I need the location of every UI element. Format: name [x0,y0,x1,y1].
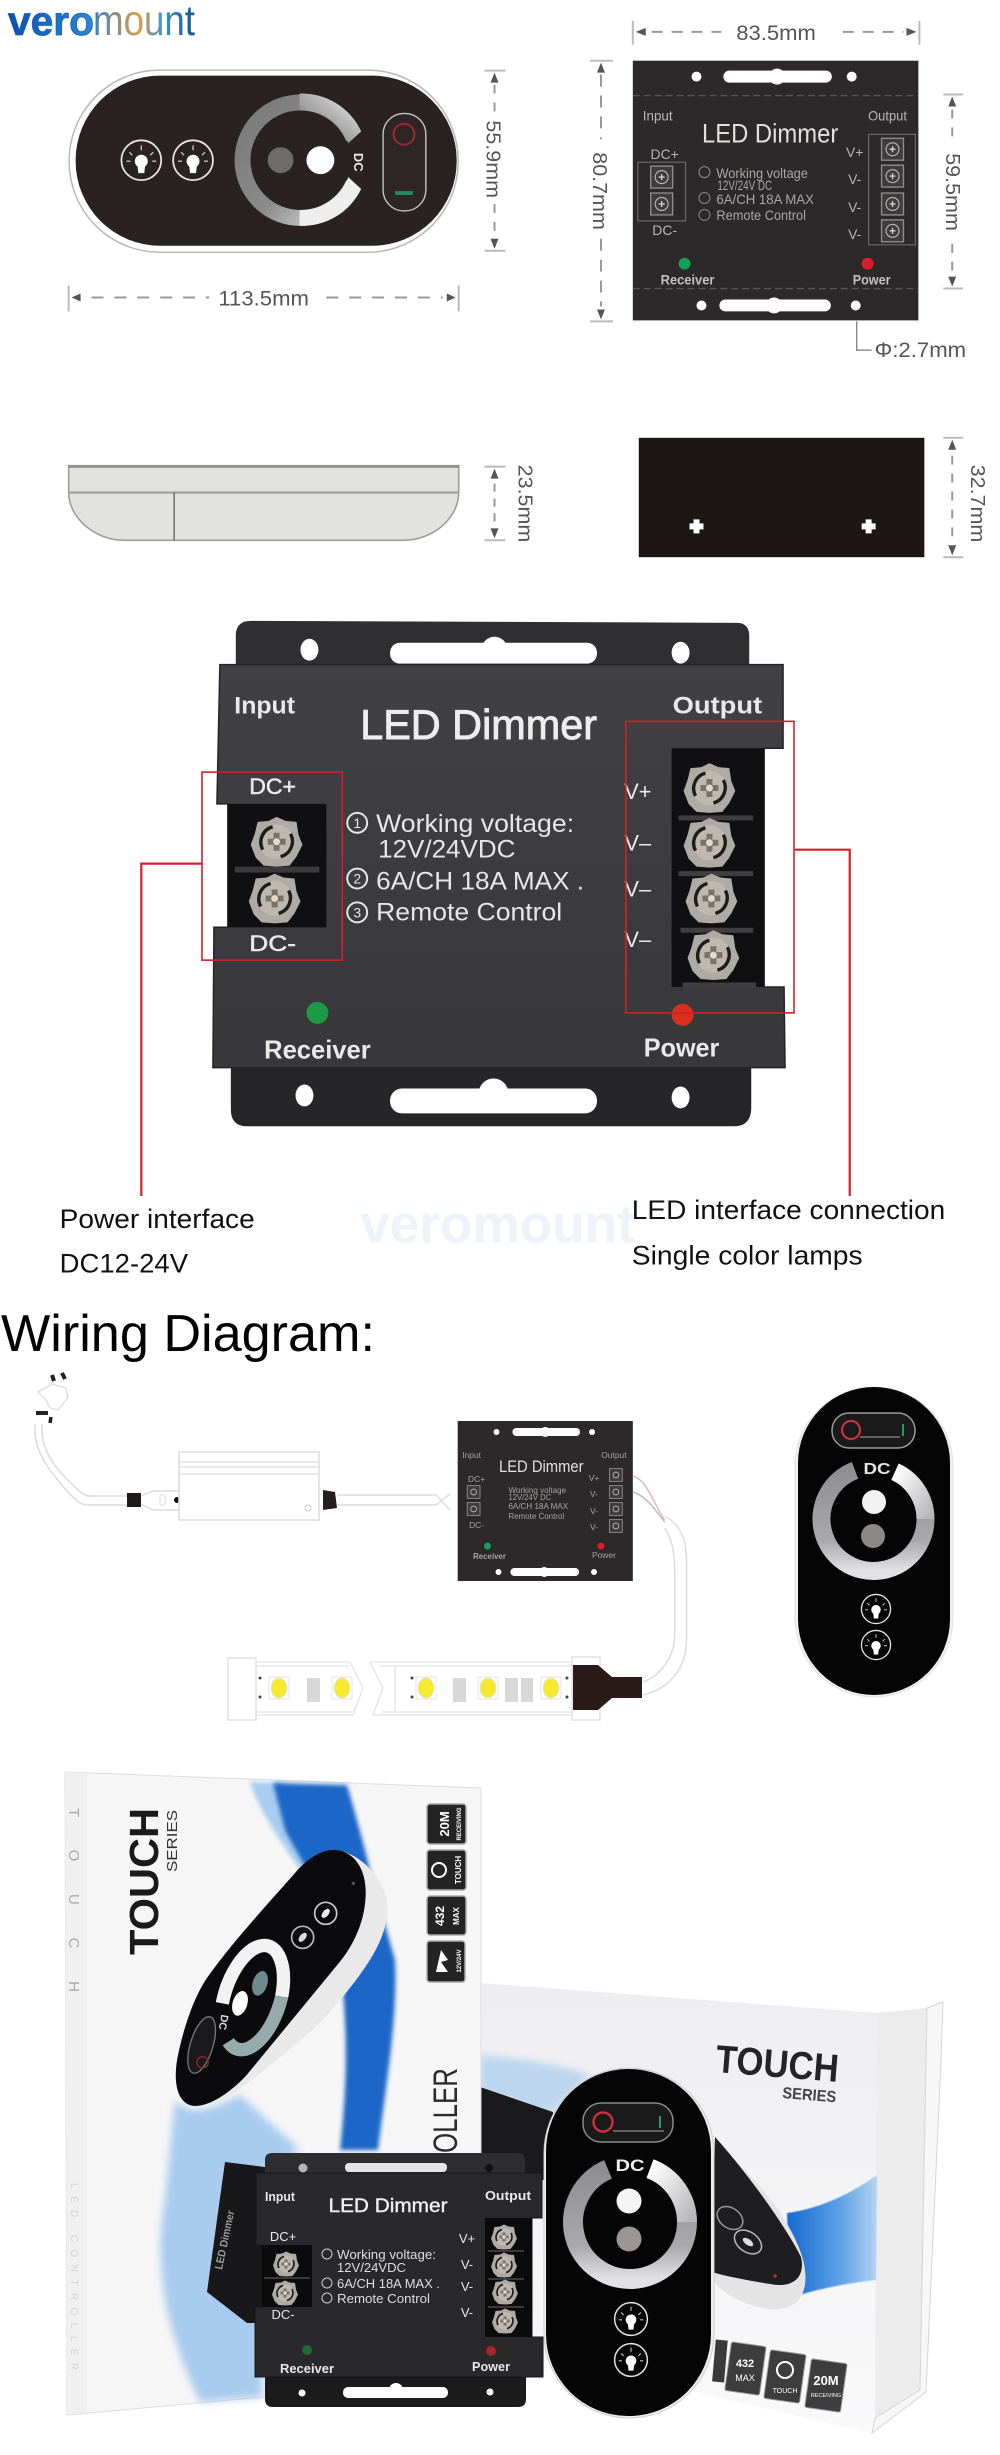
controller module top view: Power [853,272,891,288]
TOUCH SERIES title: TOUCH [714,2038,840,2091]
TOUCH SERIES title: SERIES [164,1810,181,1872]
panel labels: V+ [624,779,651,804]
specifications: 2 [353,871,361,887]
callout leader: LED interface [794,850,850,1196]
panel labels: V– [624,927,652,952]
module labels: DC+ [651,146,679,162]
dimension: 55.9mm: 55.9mm [482,120,504,198]
receiver LED [306,1002,328,1024]
remote control side view [69,466,459,540]
controller module top view: LED Dimmer [702,118,838,148]
specifications: Remote Control [337,2291,430,2306]
resistors [307,1678,533,1702]
mounting holes [298,2383,494,2398]
label: LED interface connection: LED interface connection [632,1195,945,1225]
module labels: V- [461,2257,473,2272]
specifications [322,2247,440,2306]
watermark: veromount [360,1195,635,1255]
left terminal block [262,2245,312,2307]
module labels: DC+ [270,2229,296,2244]
wiring: controller module: DC+ [468,1474,485,1484]
product box: tall: 432 [433,1906,447,1926]
right terminal block [672,748,764,987]
dimension: 32.7mm: 32.7mm [966,465,988,542]
power LED [672,1004,694,1026]
dimension: 83.5mm: 83.5mm [736,22,816,45]
module labels: Input [643,107,673,123]
module labels: Input [265,2189,296,2204]
specifications [699,165,814,223]
specifications: 3 [353,904,361,920]
strip connector [573,1665,642,1710]
label: LED interface connection: Single color lamps [632,1241,863,1271]
product box: tall: 20M [437,1811,452,1837]
dimension: 55.9mm [482,71,505,251]
panel labels: Output [673,692,762,719]
LED chips [269,1677,561,1699]
label: power interface: Power interface [60,1204,255,1234]
module behind, on tall box: LED Dimmer [213,2209,238,2271]
specifications: 6A/CH 18A MAX . [376,867,584,895]
specifications: Working voltage: [376,810,574,838]
dimension: 113.5mm: 113.5mm [218,287,309,310]
specifications: 1 [353,815,361,831]
wiring: controller module: V+ [589,1473,599,1483]
specifications [347,810,584,926]
specifications: 6A/CH 18A MAX . [337,2276,440,2291]
mounting slots [692,69,861,313]
wiring: controller module: LED Dimmer [499,1457,584,1476]
feature badges: TOUCH [773,2388,797,2395]
touch ring [235,93,361,226]
specifications: Remote Control [716,207,806,223]
wiring: LED strip [228,1657,642,1720]
product: remote control [544,2068,714,2418]
on/off pill [832,1413,915,1448]
module labels: V- [848,171,862,187]
enclosure [213,665,785,1068]
module labels: V- [848,226,862,242]
dimension: hole diameter 2.7mm [857,321,966,362]
callout box: output terminals [626,721,794,1013]
DC label: DC [864,1461,891,1478]
icon: brightness up bulb [173,140,213,180]
wiring: controller module: V- [590,1506,598,1516]
product box: tall: RECEIVING [457,1807,463,1841]
wiring: controller module: 6A/CH 18A MAX [508,1501,568,1511]
specifications: 6A/CH 18A MAX [716,191,814,207]
right terminal block [485,2218,532,2337]
tilted remote illustration: DC [216,2014,230,2031]
dimension: 80.7mm [588,61,613,321]
product box: tall: MAX [452,1906,461,1925]
product photo: LED dimmer front: LED Dimmer [360,701,597,748]
product photo: LED dimmer front [213,621,785,1126]
panel labels: Input [234,692,295,719]
product: LED dimmer module: LED Dimmer [328,2196,448,2217]
module labels: V- [461,2305,473,2320]
dimension: 32.7mm [943,438,988,557]
feature badges: RECEIVING [811,2393,841,2399]
wiring: controller module: Output [601,1450,627,1460]
module labels: Power [472,2359,510,2374]
spine text: TOUCH [65,1808,82,1992]
module labels: DC- [652,222,677,238]
wiring: plug and mains cable [35,1373,180,1510]
controller module side view [639,438,924,557]
DC label: DC [351,153,366,172]
blue swoosh [160,1782,395,2402]
label: power interface: DC12-24V [60,1249,188,1279]
touch ring [822,1470,926,1571]
specifications: 12V/24VDC [378,836,515,864]
TOUCH SERIES title: TOUCH [121,1808,167,1955]
blue swoosh [787,2175,877,2298]
icon: brightness down bulb [121,140,161,180]
module labels: V+ [846,144,863,160]
wiring: controller module: DC- [469,1520,484,1530]
feature badges [427,1804,466,1982]
module reflection on box [480,2087,553,2180]
wiring: controller module: Working voltage [508,1485,566,1495]
remote control photo [795,1387,953,1697]
module labels: Output [868,107,907,123]
callout leader: power interface [141,864,202,1196]
logo: veromount [8,0,195,45]
panel labels: V– [624,831,652,856]
dimension: 59.5mm: 59.5mm [941,153,963,231]
output terminals [869,134,915,245]
solder pads [258,1676,568,1698]
module labels: V- [461,2279,473,2294]
feature badges: MAX [735,2373,755,2383]
DC label: DC [616,2156,644,2175]
module labels [643,107,907,242]
product box: tall: 12V/24V [457,1949,463,1973]
panel labels: DC+ [249,774,296,799]
controller module top view: Receiver [661,272,715,288]
dimension: 23.5mm [485,465,535,542]
module labels: V- [848,199,862,215]
callout box: input terminals [202,772,342,960]
wiring: controller module: Power [592,1550,616,1560]
wiring: controller module: 12V/24V DC [508,1492,551,1502]
module behind, on tall box [207,2162,265,2323]
tilted remote illustration [176,1850,387,2107]
on/off pill [383,113,426,211]
module labels [265,2188,532,2376]
feature badges [712,2340,847,2412]
dimension: 59.5mm [941,95,963,289]
panel labels: V– [624,876,652,901]
dimension: 23.5mm: 23.5mm [513,465,535,542]
module labels: Receiver [280,2361,334,2376]
feature badges: 20M [813,2373,839,2388]
TOUCH SERIES title: SERIES [782,2085,837,2106]
input terminals [638,162,686,221]
specifications: Remote Control [376,898,562,926]
specifications: 12V/24V DC [717,177,772,193]
module labels: V+ [459,2231,475,2246]
wiring: controller module: V- [590,1522,598,1532]
spine text [65,1808,82,2370]
module labels: DC- [271,2307,295,2322]
panel labels: DC- [249,931,296,956]
on/off pill [583,2103,673,2142]
panel labels: Receiver [264,1037,371,1065]
bottom bracket [231,1066,751,1126]
top bracket [236,621,749,672]
spine text: LED CONTROLLER [68,2183,79,2370]
label: LED interface connection [632,1195,945,1271]
dimension: 80.7mm: 80.7mm [588,152,610,230]
specifications: Working voltage [716,165,808,181]
dimension: 83.5mm [633,21,919,45]
left terminal block [228,804,326,927]
specifications: 12V/24VDC [337,2260,406,2275]
tilted remote behind [710,2137,805,2309]
wiring: output cable [633,1476,687,1695]
module labels: Output [485,2188,532,2203]
wiring: controller module: Receiver [473,1551,507,1561]
wiring: controller module [458,1421,633,1581]
CONTROLLER text: OLLER [427,2068,465,2153]
product box: wide [480,1983,943,2433]
remote control top view [69,70,458,252]
wiring: power supply [179,1452,450,1520]
heading: Wiring Diagram: Wiring Diagram: [1,1305,375,1363]
wiring: controller module: V- [590,1489,598,1499]
feature badges: 432 [736,2358,754,2370]
touch ring [573,2169,687,2279]
wiring: controller module: Input [462,1450,482,1460]
product: LED dimmer module [255,2153,543,2407]
controller module top view [633,61,918,320]
wiring: controller module: Remote Control [508,1511,564,1521]
product box: tall: TOUCH [454,1856,463,1884]
panel labels [234,692,762,1065]
label: power interface [60,1204,255,1279]
dimension: 113.5mm [69,286,459,311]
panel labels: Power [644,1035,719,1063]
specifications: Working voltage: [337,2247,436,2262]
product box: tall [65,1772,481,2415]
dimension: hole diameter 2.7mm: Φ:2.7mm [875,339,966,362]
